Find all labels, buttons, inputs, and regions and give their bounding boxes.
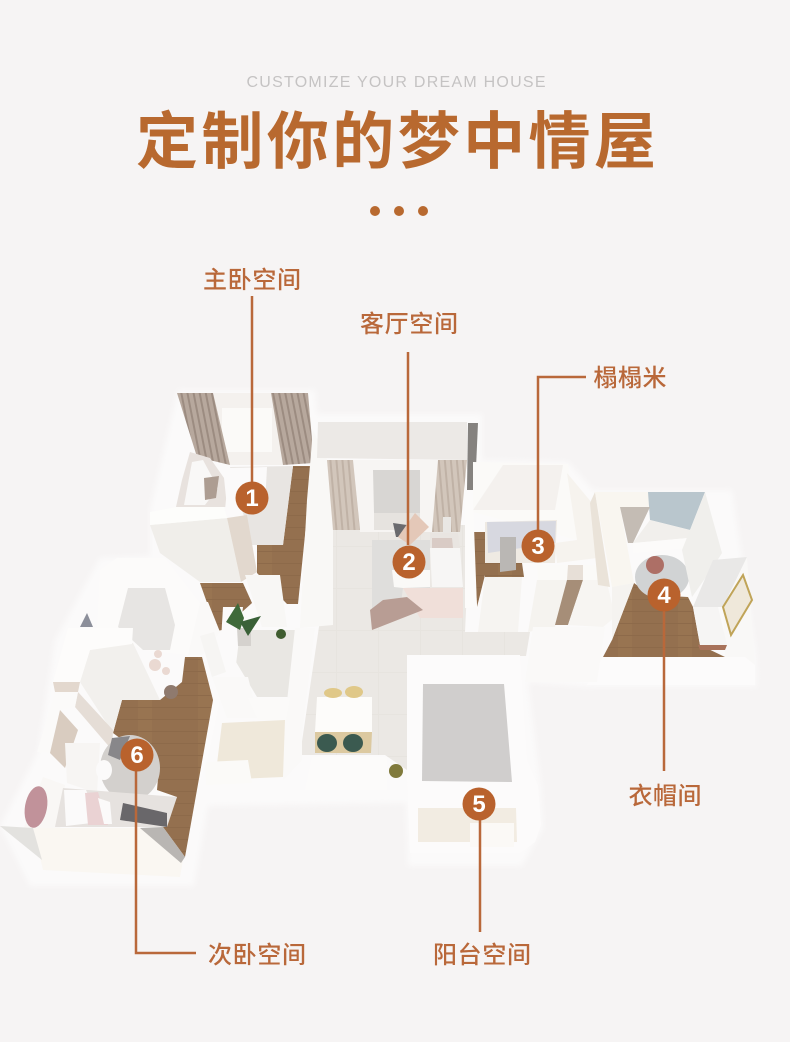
wood floor (257, 466, 312, 604)
panel: second bedroom (0, 558, 213, 877)
chair (96, 760, 112, 780)
closet floor (118, 588, 175, 650)
bench (693, 607, 727, 645)
wall (197, 700, 220, 790)
dark curtain (467, 423, 478, 490)
label: cloakroom: 衣帽间 (628, 783, 702, 810)
wood floor (113, 657, 213, 857)
standing lamp (500, 537, 516, 572)
L-shaped ledge (555, 473, 597, 563)
armchair (398, 513, 429, 545)
bookcase (50, 710, 78, 768)
window sliver (80, 613, 93, 627)
badge 4: 4 (657, 582, 671, 609)
badge 5: 5 (472, 791, 486, 818)
dining table (315, 697, 372, 732)
rug (230, 466, 293, 545)
coffee table (392, 570, 430, 588)
small plant (276, 629, 286, 639)
wardrobe top (53, 628, 133, 682)
floor plan (0, 390, 757, 886)
balcony blinds (33, 828, 183, 877)
wall top (595, 492, 650, 587)
window (353, 460, 438, 532)
end wall (723, 557, 755, 665)
back wall (473, 462, 577, 540)
label: balcony: 阳台空间 (433, 942, 531, 969)
wood floor (603, 583, 725, 657)
bedside desk (225, 467, 267, 510)
throw blanket (120, 803, 167, 827)
beige side (590, 492, 610, 587)
left wall (37, 692, 78, 753)
badge 1: 1 (245, 485, 259, 512)
panel: tatami room (465, 462, 615, 632)
wood corridor (200, 583, 252, 631)
floor wood (485, 563, 524, 577)
badge 2 (392, 546, 426, 578)
blinds sliver (0, 826, 42, 860)
badge 3: 3 (531, 533, 545, 560)
panel: living room (305, 422, 478, 790)
label: second bedroom: 次卧空间 (208, 942, 306, 969)
title: 定制你的梦中情屋 (136, 108, 656, 177)
rug (635, 555, 689, 599)
wall face (612, 583, 634, 640)
left curtain (177, 393, 230, 465)
shoe shelf (555, 580, 583, 625)
beige strip (53, 682, 80, 692)
wall cabinets (300, 430, 333, 628)
label: master bedroom: 主卧空间 (203, 267, 301, 294)
bathroom floor (215, 720, 285, 780)
badge 6 (120, 738, 154, 772)
glass shelves (682, 492, 722, 597)
side table (443, 517, 451, 533)
dining stools (315, 732, 372, 753)
badge 4 (648, 578, 680, 612)
closet walls (97, 558, 200, 655)
tile floor (418, 808, 517, 842)
badge 5 (462, 788, 496, 820)
front wall (587, 657, 755, 685)
toy bear (164, 685, 178, 699)
sofa (430, 533, 460, 548)
panel: master bedroom (150, 393, 333, 628)
closet side (568, 580, 615, 627)
badge 1 (236, 482, 268, 514)
bed (55, 788, 177, 827)
closet top (537, 565, 598, 580)
step (470, 823, 514, 847)
desk (65, 743, 100, 793)
closet beige (567, 565, 583, 580)
round mirror (22, 784, 50, 830)
chairs (324, 686, 363, 698)
vanity desk (633, 538, 690, 553)
panel: hallway (168, 575, 315, 790)
shelf (75, 692, 113, 750)
back wall (23, 777, 65, 830)
left wall (465, 500, 477, 608)
plant (226, 603, 261, 646)
vase (389, 764, 403, 778)
chaise (403, 588, 463, 618)
laundry floor (233, 630, 295, 697)
door (478, 577, 522, 632)
badge 3 (522, 530, 554, 562)
closet door (528, 580, 567, 632)
badge 2: 2 (402, 549, 416, 576)
house base (0, 390, 757, 886)
wardrobe (150, 518, 241, 582)
wardrobe top (150, 507, 227, 525)
wardrobe (80, 643, 160, 733)
right curtain (432, 460, 467, 532)
decorative dots (370, 206, 428, 216)
stool (646, 556, 664, 574)
sideboard (305, 757, 387, 790)
short wall (220, 607, 243, 673)
doors (168, 602, 220, 655)
label: tatami: 榻榻米 (594, 365, 666, 392)
vanity niche (620, 507, 650, 543)
left curtain (327, 460, 360, 530)
window (648, 492, 705, 530)
pendant lamp (149, 650, 170, 675)
double door (525, 627, 605, 682)
side panel (693, 557, 747, 607)
label: living room: 客厅空间 (360, 311, 458, 338)
window (473, 465, 563, 510)
right curtain (271, 393, 314, 465)
rug (372, 540, 430, 610)
back sheer curtain (317, 422, 467, 460)
window (213, 393, 283, 465)
blanket (370, 597, 423, 630)
walls (407, 655, 541, 853)
grey floor (422, 684, 512, 782)
living room floor (300, 525, 530, 770)
dark throw (393, 523, 407, 537)
partition (283, 628, 315, 780)
badge 6: 6 (130, 742, 144, 769)
panel: balcony (407, 655, 541, 853)
tatami platform (485, 520, 557, 563)
rug (100, 735, 160, 801)
grey sliver (140, 827, 185, 863)
gold mirror (723, 575, 752, 635)
bed (176, 452, 227, 507)
door (245, 575, 287, 627)
panel: cloakroom (525, 492, 755, 685)
callout lines (136, 296, 664, 953)
wall under window (633, 520, 690, 543)
subtitle: CUSTOMIZE YOUR DREAM HOUSE (246, 74, 546, 91)
wood (473, 532, 522, 607)
